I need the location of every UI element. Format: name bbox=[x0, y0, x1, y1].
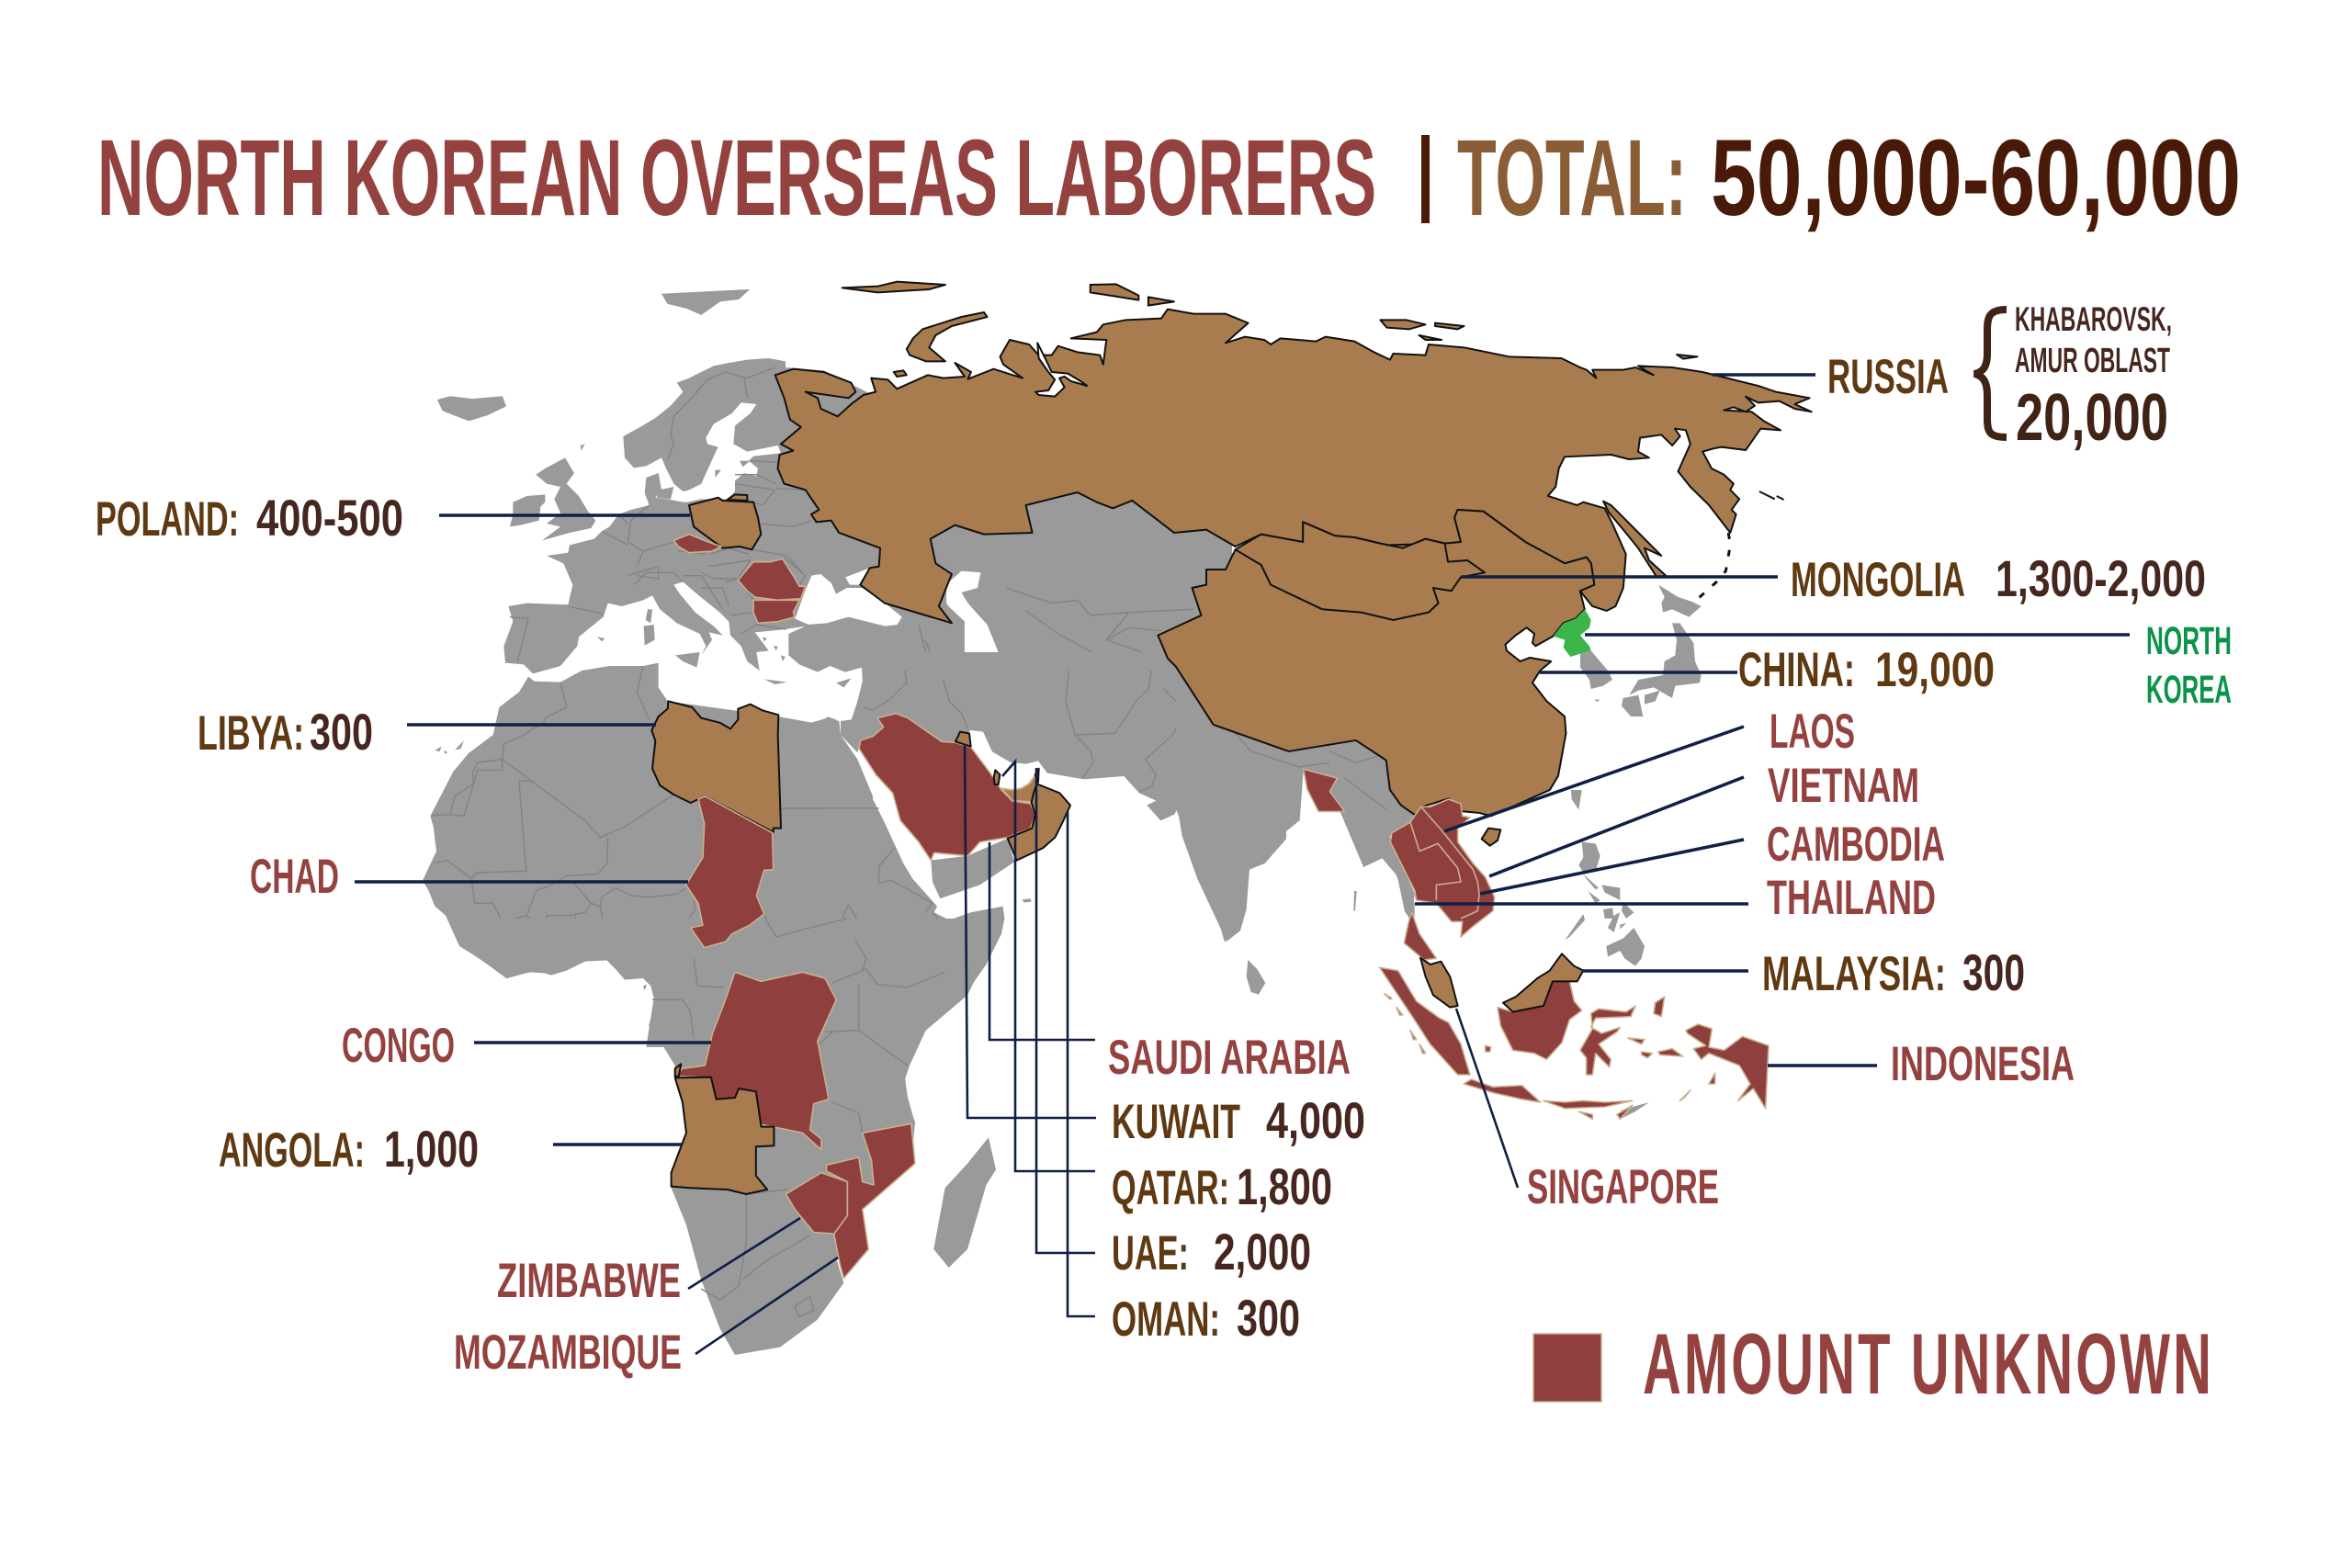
label: Libya 300: LIBYA: bbox=[198, 706, 304, 761]
label: China 19,000: 19,000 bbox=[1875, 643, 1995, 697]
label: Oman 300: OMAN: bbox=[1112, 1292, 1220, 1347]
land: Korea and Japan bbox=[1580, 585, 1702, 716]
country: Chad bbox=[686, 796, 774, 948]
country: Kaliningrad bbox=[728, 494, 747, 501]
country: Russia bbox=[775, 282, 1812, 623]
label: Russia: RUSSIA bbox=[1827, 350, 1949, 404]
callout: Russian regions and count: 20,000 bbox=[2016, 381, 2168, 455]
leader: Qatar bbox=[1002, 761, 1095, 1171]
label: Kuwait 4,000: 4,000 bbox=[1266, 1091, 1365, 1149]
leader: Oman bbox=[1068, 811, 1095, 1316]
land: Central Asia bbox=[807, 450, 1232, 726]
land: southern Africa and Madagascar bbox=[450, 919, 1005, 1355]
island: Hainan bbox=[1482, 829, 1500, 846]
leader: Poland bbox=[439, 513, 690, 517]
label: Singapore: SINGAPORE bbox=[1527, 1160, 1719, 1214]
land: Philippines, Taiwan, Timor and Andaman islands bbox=[1353, 790, 1649, 1119]
leader: Malaysia bbox=[1582, 969, 1748, 973]
label: China 19,000: CHINA: bbox=[1738, 643, 1855, 697]
label: Angola 1,000: ANGOLA: bbox=[219, 1123, 365, 1178]
leader: Indonesia bbox=[1768, 1064, 1877, 1067]
callout: Russian regions and count: KHABAROVSK, bbox=[2015, 300, 2172, 338]
label: Congo: CONGO bbox=[342, 1019, 455, 1073]
leader lines bbox=[355, 375, 2130, 1354]
label: Libya 300: 300 bbox=[310, 703, 373, 761]
label: North Korea: NORTH bbox=[2146, 619, 2232, 663]
label: UAE 2,000: UAE: bbox=[1112, 1226, 1189, 1280]
label: Malaysia 300: 300 bbox=[1962, 943, 2025, 1001]
label: Poland 400-500 bbox=[96, 489, 403, 547]
leader: Angola bbox=[553, 1143, 683, 1146]
callout: Russian regions and count: AMUR OBLAST bbox=[2015, 342, 2170, 380]
label: Laos: LAOS bbox=[1770, 705, 1855, 759]
label: UAE 2,000 bbox=[1112, 1223, 1311, 1280]
label: Qatar 1,800: QATAR: bbox=[1112, 1161, 1229, 1215]
label: Angola 1,000: 1,000 bbox=[384, 1120, 479, 1178]
label: Zimbabwe: ZIMBABWE bbox=[497, 1254, 681, 1308]
leader: UAE bbox=[1036, 768, 1095, 1253]
country: North Korea bbox=[1554, 609, 1591, 657]
leader: Chad bbox=[355, 880, 688, 884]
icon: curly brace bbox=[1974, 310, 2007, 437]
legend: swatch bbox=[1533, 1334, 1601, 1402]
label: Kuwait 4,000: KUWAIT bbox=[1112, 1095, 1240, 1149]
leader: Libya bbox=[407, 723, 656, 727]
leader: Zimbabwe bbox=[688, 1218, 800, 1289]
country: Malaysia bbox=[1420, 953, 1583, 1012]
legend bbox=[1533, 1315, 2214, 1412]
label: Vietnam: VIETNAM bbox=[1768, 759, 1919, 813]
country: Poland bbox=[689, 498, 761, 549]
label: Oman 300: 300 bbox=[1237, 1289, 1300, 1347]
land: Europe and Turkey bbox=[503, 358, 946, 726]
land: eastern India and Myanmar bbox=[1176, 614, 1416, 942]
label: North Korea bbox=[2146, 619, 2232, 712]
countries: Congo, Zimbabwe, Mozambique bbox=[675, 972, 915, 1279]
label: Thailand: THAILAND bbox=[1767, 871, 1936, 925]
title: main heading: NORTH KOREAN OVERSEAS LABORERS bbox=[97, 118, 1376, 239]
label: Poland 400-500: POLAND: bbox=[96, 492, 239, 547]
countries: Laos, Vietnam, Thailand, Cambodia bbox=[1390, 799, 1495, 960]
leader: China bbox=[1540, 671, 1737, 674]
leader: North Korea bbox=[1585, 633, 2130, 637]
leader: Kuwait bbox=[965, 744, 1096, 1118]
country: Saudi Arabia bbox=[859, 714, 1035, 861]
land: northern and western Africa bbox=[423, 663, 873, 1047]
land: Middle East, India, Horn of Africa bbox=[827, 652, 1286, 1130]
country: Libya bbox=[651, 701, 781, 832]
label: Qatar 1,800: 1,800 bbox=[1237, 1157, 1332, 1215]
leader: Saudi Arabia bbox=[989, 842, 1095, 1040]
leader: Cambodia bbox=[1480, 840, 1744, 894]
country: Mongolia bbox=[1236, 522, 1485, 620]
leader: Mongolia bbox=[1461, 575, 1778, 579]
leader: Mozambique bbox=[695, 1258, 838, 1354]
label: Mongolia 1,300-2,000: MONGOLIA bbox=[1791, 553, 1965, 607]
label: Mongolia 1,300-2,000: 1,300-2,000 bbox=[1996, 549, 2206, 607]
country: Angola bbox=[672, 1064, 774, 1194]
title: divider bar bbox=[1421, 135, 1430, 223]
label: North Korea: KOREA bbox=[2146, 668, 2232, 712]
world map bbox=[423, 282, 1812, 1355]
title bbox=[97, 118, 2241, 239]
leader: Congo bbox=[474, 1041, 711, 1044]
label: Chad: CHAD bbox=[250, 850, 339, 904]
label: Indonesia: INDONESIA bbox=[1891, 1037, 2075, 1091]
leader: Vietnam bbox=[1489, 777, 1744, 876]
leader: Laos bbox=[1444, 727, 1744, 831]
title: total label: TOTAL: bbox=[1457, 118, 1687, 239]
countries: Czech Republic, Romania, Bulgaria bbox=[673, 535, 806, 623]
callout: Russian regions and count bbox=[2015, 300, 2172, 455]
country: Indonesia bbox=[1380, 967, 1769, 1119]
leader: Thailand bbox=[1415, 902, 1748, 906]
label: Malaysia 300: MALAYSIA: bbox=[1762, 947, 1946, 1001]
land: Iceland and Svalbard bbox=[437, 289, 750, 421]
leader: Singapore bbox=[1456, 1009, 1518, 1188]
label: Mozambique: MOZAMBIQUE bbox=[454, 1325, 682, 1380]
label: China 19,000 bbox=[1738, 643, 1995, 697]
label: UAE 2,000: 2,000 bbox=[1214, 1223, 1311, 1280]
label: Cambodia: CAMBODIA bbox=[1767, 818, 1945, 872]
country: Bangladesh bbox=[1304, 769, 1345, 811]
country: China bbox=[1158, 510, 1594, 816]
label: Poland 400-500: 400-500 bbox=[256, 489, 403, 547]
label: Saudi Arabia: SAUDI ARABIA bbox=[1108, 1031, 1351, 1085]
leader: Russia bbox=[1713, 373, 1815, 377]
countries: Kuwait, Qatar, UAE, Oman bbox=[956, 732, 1070, 861]
label: Mongolia 1,300-2,000 bbox=[1791, 549, 2206, 607]
